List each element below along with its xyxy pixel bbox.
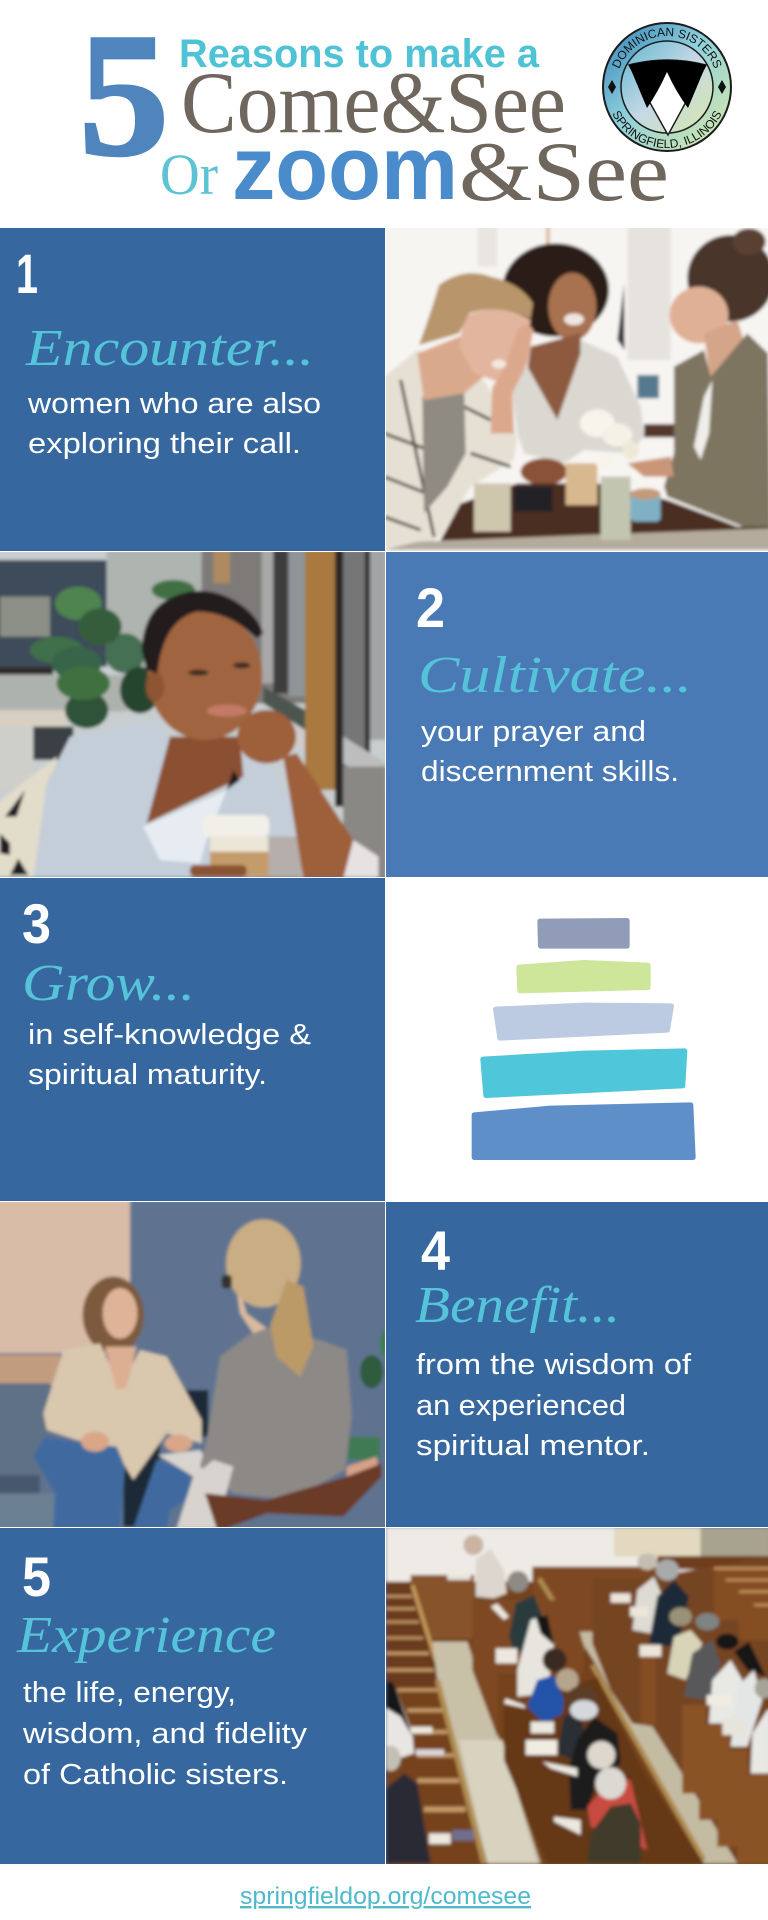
body text: wisdom, and fidelity [22, 1718, 308, 1750]
photo: three women laughing at a cafe table [377, 220, 768, 567]
panel 4: Benefit [386, 1202, 768, 1527]
heading: Grow: Grow... [22, 955, 195, 1012]
body text: discernment skills. [421, 756, 679, 788]
table [441, 483, 768, 553]
photo: young woman with coffee by window [0, 550, 393, 891]
face and hair [148, 610, 262, 740]
heading: Experience: Experience [16, 1607, 276, 1664]
seated woman [83, 1277, 144, 1353]
left figures [384, 1683, 414, 1760]
number 3: 3 [22, 892, 51, 955]
body text [22, 1677, 308, 1791]
aisles [432, 1642, 541, 1863]
number 1: 1 [16, 242, 38, 305]
number 2: 2 [416, 576, 445, 639]
body text: from the wisdom of [416, 1349, 692, 1381]
right pews [590, 1566, 740, 1864]
cushion [0, 757, 57, 880]
body text: an experienced [416, 1390, 626, 1422]
plant [55, 587, 102, 620]
big numeral 5: 5 [79, 0, 169, 193]
heading: Encounter: Encounter... [25, 320, 314, 377]
panel 5: Experience [0, 1528, 385, 1864]
body text [27, 388, 321, 460]
heading line: Come&See: Come&See [181, 55, 566, 152]
heading word: zoom: zoom [232, 119, 458, 219]
header title [79, 0, 669, 219]
heading word: Or: Or [160, 142, 218, 207]
right woman [687, 235, 768, 322]
panel 3: Grow [0, 878, 385, 1201]
body text: women who are also [27, 388, 321, 420]
body text: spiritual mentor. [416, 1430, 650, 1462]
heading line: Reasons to make a: Reasons to make a [179, 32, 540, 76]
body text: in self-knowledge & [28, 1019, 311, 1051]
sisters right rows [637, 1553, 657, 1570]
body text: your prayer and [421, 716, 646, 748]
footer link: springfieldop.org/comesee [240, 1883, 531, 1910]
logo: Dominican Sisters seal: SPRINGFIELD, ILLINOIS [613, 111, 721, 148]
man at lectern [476, 1548, 507, 1598]
left steps [386, 1584, 434, 1686]
panel 1: Encounter [0, 228, 385, 551]
heading: Cultivate: Cultivate... [418, 647, 692, 704]
stacked bar pyramid [474, 921, 693, 1157]
plant [360, 1355, 383, 1388]
logo: Dominican Sisters seal: DOMINICAN SISTERS [612, 28, 722, 68]
woman from behind [200, 1327, 352, 1500]
heading: Benefit: Benefit... [415, 1277, 620, 1334]
body text: exploring their call. [28, 428, 301, 460]
number 5: 5 [22, 1545, 51, 1608]
body text [28, 1019, 311, 1091]
heading word: &See: &See [459, 125, 669, 219]
logo: Dominican Sisters seal [602, 22, 732, 152]
photo: sisters praying in chapel pews [377, 1520, 768, 1867]
sisters center row [507, 1571, 529, 1592]
body text: of Catholic sisters. [23, 1759, 288, 1791]
left woman [384, 350, 517, 548]
body text [416, 1349, 692, 1462]
panel 2: Cultivate [386, 552, 768, 877]
photo: counseling conversation between two women [0, 1200, 393, 1533]
center pews [472, 1600, 584, 1737]
body text [421, 716, 679, 788]
body text: the life, energy, [23, 1677, 236, 1709]
middle woman [502, 243, 609, 337]
coffee cup and hand [203, 815, 269, 837]
body text: spiritual maturity. [28, 1059, 267, 1091]
number 4: 4 [421, 1219, 450, 1282]
shirt [33, 720, 300, 878]
